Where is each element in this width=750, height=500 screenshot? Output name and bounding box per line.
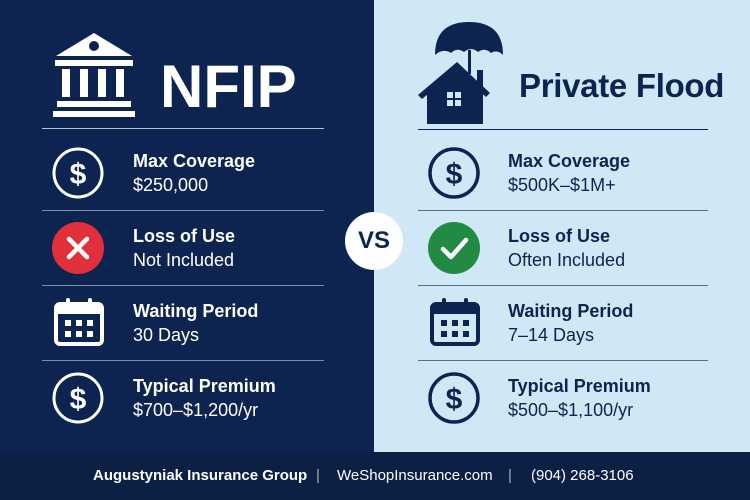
panel: NFIP <box>0 0 374 452</box>
row: loss of use <box>52 222 235 274</box>
row: loss of use: Often Included <box>508 250 625 270</box>
heading: NFIP: NFIP <box>160 53 297 120</box>
icon: dollar: $ <box>70 383 87 416</box>
row: loss of use: Loss of Use <box>508 226 610 246</box>
icon: dollar: $ <box>70 158 87 191</box>
footer: (904) 268-3106 <box>531 467 634 484</box>
row: typical premium: Typical Premium <box>508 376 651 396</box>
row: waiting period: 30 Days <box>133 325 199 345</box>
row: typical premium: $700–$1,200/yr <box>133 400 258 420</box>
icon: dollar: $ <box>446 158 463 191</box>
icon: dollar <box>428 372 480 424</box>
icon: calendar <box>430 298 480 346</box>
footer <box>0 452 750 500</box>
footer: | <box>508 467 512 484</box>
row: waiting period: Waiting Period <box>133 301 258 321</box>
row: max coverage: $250,000 <box>133 175 208 195</box>
heading: Private Flood: Private Flood <box>519 67 724 104</box>
icon: dollar: $ <box>446 383 463 416</box>
icon: calendar <box>54 298 104 346</box>
row: typical premium <box>52 372 276 424</box>
icon: dollar <box>52 372 104 424</box>
icon: dollar <box>52 148 104 198</box>
row: loss of use <box>428 222 625 274</box>
panel: Private Flood <box>374 0 750 452</box>
footer: Augustyniak Insurance Group <box>93 467 307 484</box>
row: typical premium: $500–$1,100/yr <box>508 400 633 420</box>
icon: green check <box>428 222 480 274</box>
row: max coverage: Max Coverage <box>508 151 630 171</box>
icon: dollar <box>428 147 480 199</box>
icon: red x <box>52 222 104 274</box>
row: loss of use: Loss of Use <box>133 226 235 246</box>
row: loss of use: Not Included <box>133 250 234 270</box>
footer: | <box>316 467 320 484</box>
row: waiting period <box>54 298 258 346</box>
footer: WeShopInsurance.com <box>337 467 493 484</box>
row: waiting period: Waiting Period <box>508 301 633 321</box>
row: waiting period <box>430 298 633 346</box>
icon: government building <box>53 33 135 117</box>
row: max coverage <box>428 147 630 199</box>
row: waiting period: 7–14 Days <box>508 325 594 345</box>
row: max coverage: $500K–$1M+ <box>508 175 616 195</box>
row: typical premium: Typical Premium <box>133 376 276 396</box>
row: max coverage: Max Coverage <box>133 151 255 171</box>
row: typical premium <box>428 372 651 424</box>
badge: VS: VS <box>358 227 390 254</box>
badge: VS <box>345 212 403 270</box>
row: max coverage <box>52 148 255 198</box>
icon: house with umbrella <box>418 22 503 124</box>
